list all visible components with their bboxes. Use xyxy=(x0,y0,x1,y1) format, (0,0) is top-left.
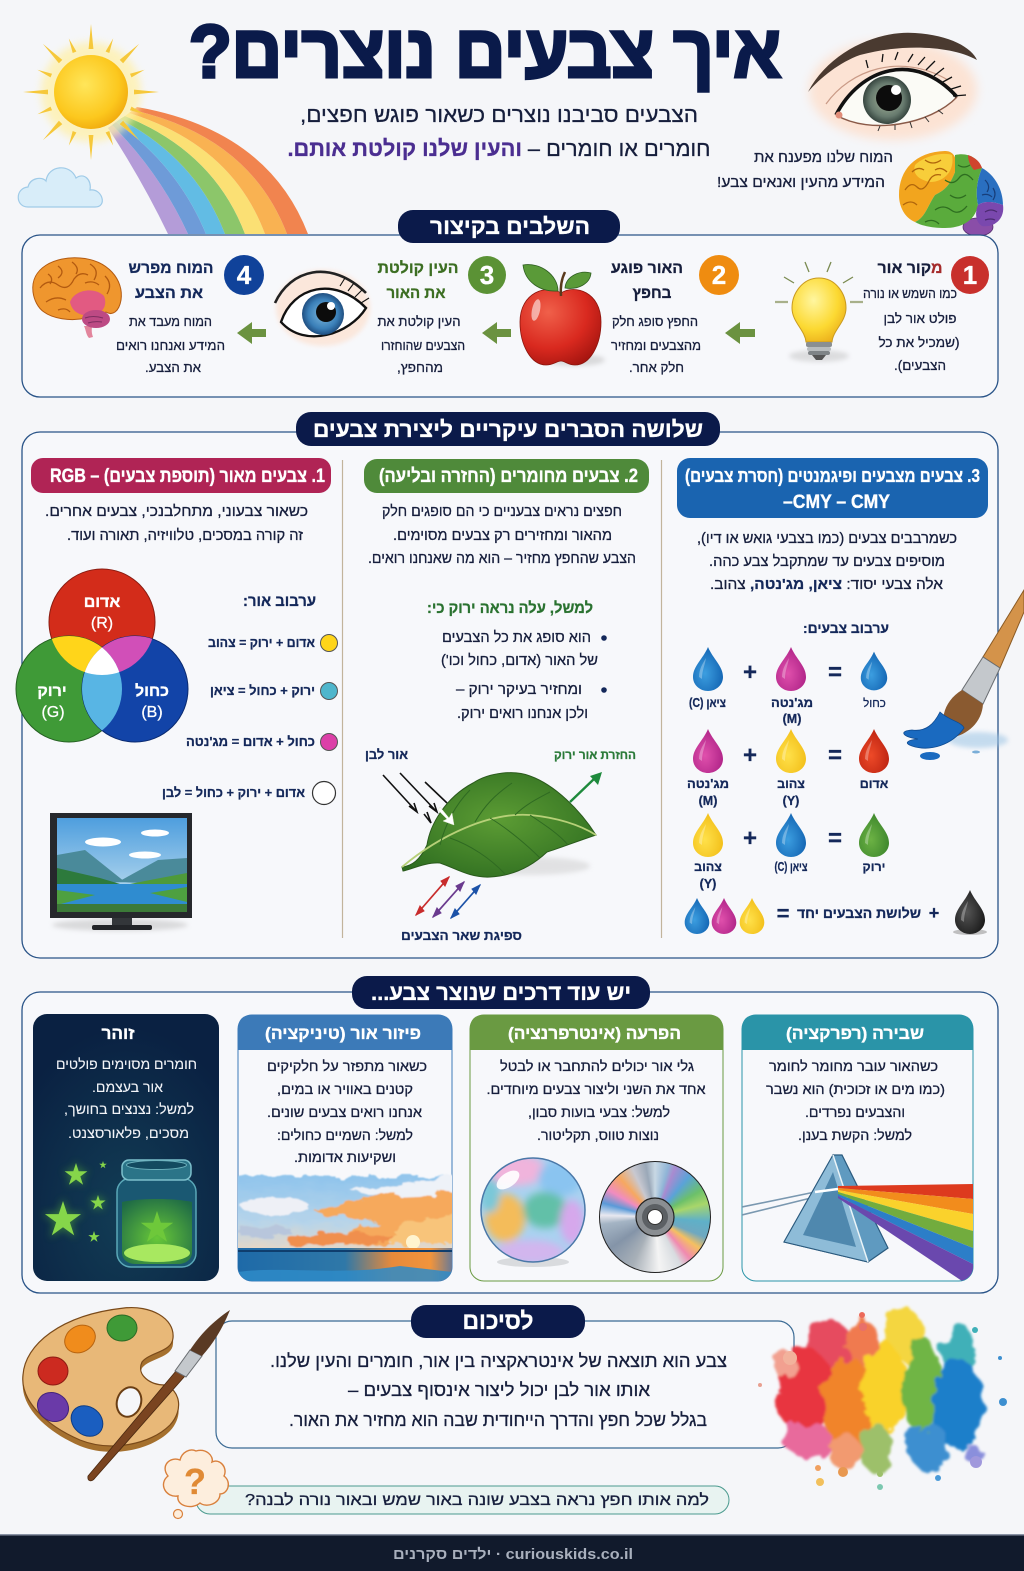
arrow xyxy=(482,322,511,344)
heading: more ways xyxy=(352,976,650,1009)
subtitle xyxy=(287,102,710,161)
subtitle: חומרים או חומרים – והעין שלנו קולטת אותם. xyxy=(287,136,710,161)
chart: pigment mixing: ערבוב צבעים: xyxy=(803,620,889,636)
illustration: eye xyxy=(808,33,977,140)
mix row: yellow + cyan = green: צהוב xyxy=(694,860,722,874)
step 3: eye absorbs light: העין קולטת xyxy=(378,259,458,277)
mix row: yellow + cyan = green: ירוק xyxy=(863,860,885,874)
example list: leaf xyxy=(427,600,607,722)
chart: RGB venn diagram: (G) xyxy=(41,704,65,721)
step 1: light source: כמו השמש או נורה xyxy=(863,286,957,301)
panel: steps xyxy=(22,210,998,397)
example list: leaf: ולכן אנחנו רואים ירוק. xyxy=(457,705,588,722)
step 3: eye absorbs light: הצבעים שהוחזרו xyxy=(381,338,465,353)
step 4: brain interprets: את הצבע xyxy=(135,285,203,302)
illustration: prism and spectrum xyxy=(742,1155,973,1281)
legend: light mixing: אדום + ירוק + כחול = לבן xyxy=(162,785,305,800)
icon: apple xyxy=(520,265,605,366)
card: interference: למשל: צבעי בועות סבון, xyxy=(528,1104,670,1120)
icon: light bulb xyxy=(775,262,863,362)
illustration: rainbow paint splash xyxy=(758,1309,1007,1490)
step 4: brain interprets: המידע ואנחנו רואים xyxy=(116,338,225,353)
card: scattering: פיזור אור (טיניקציה) xyxy=(265,1024,421,1043)
illustration: leaf reflection: החזרת אור ירוק xyxy=(554,748,636,762)
summary text: צבע הוא תוצאה של אינטראקציה בין אור, חומרים והעין שלנו. xyxy=(270,1351,727,1371)
mix row: magenta + yellow = red: מג'נטה xyxy=(687,777,729,791)
legend: light mixing: כחול + אדום = מג'נטה xyxy=(186,734,315,749)
caption: brain xyxy=(717,149,893,191)
example list: leaf: ומחזיר בעיקר ירוק – xyxy=(456,681,582,698)
card: interference: נוצות טווס, תקליטור. xyxy=(537,1127,659,1143)
chart: RGB venn diagram: ירוק xyxy=(37,683,67,700)
legend: light mixing: אדום + ירוק = צהוב xyxy=(208,635,315,650)
step 4: brain interprets: המוח מעבד את xyxy=(129,314,212,329)
card: glow: מסכים, פלאורסצנט. xyxy=(68,1125,189,1141)
illustration: leaf reflection: אור לבן xyxy=(365,747,408,762)
mix row: cyan + magenta = blue xyxy=(689,647,887,726)
heading: summary: לסיכום xyxy=(462,1308,534,1335)
step 1: light source: (שמכיל את כל xyxy=(878,335,960,350)
card: refraction: והצבעים נפרדים. xyxy=(805,1104,905,1120)
mix row: cyan + magenta = blue: ציאן (C) xyxy=(689,696,726,710)
chart: RGB venn diagram: כחול xyxy=(135,682,169,700)
card: scattering: אנחנו רואים צבעים שונים. xyxy=(267,1104,422,1120)
legend: light mixing xyxy=(162,593,338,804)
card: scattering: למשל: השמיים כחולים: xyxy=(277,1127,413,1143)
mix row: yellow + cyan = green: + xyxy=(743,825,757,852)
mix row: all three = black xyxy=(685,890,987,935)
mix row: cyan + magenta = blue: כחול xyxy=(863,697,886,710)
panel: more ways xyxy=(22,976,998,1293)
step 3: eye absorbs light xyxy=(378,256,506,375)
step 3: eye absorbs light: את האור xyxy=(386,285,446,302)
illustration: paintbrush xyxy=(904,590,1024,760)
heading: summary xyxy=(411,1305,585,1338)
mix row: all three = black: שלושת הצבעים יחד xyxy=(797,905,921,921)
summary text: בגלל שכל חפץ והדרך הייחודית שבה הוא מחזיר את האור. xyxy=(289,1410,707,1430)
illustration: television xyxy=(50,813,192,931)
card: scattering: קטנים באוויר או במים, xyxy=(277,1081,413,1097)
step 2: light hits object: מהצבעים ומחזיר xyxy=(611,338,701,353)
column 3 text: מוסיפים צבעים עד שמתקבל צבע כהה. xyxy=(709,553,945,570)
illustration: soap bubble xyxy=(480,1154,585,1267)
card: refraction: שבירה (רפרקציה) xyxy=(786,1024,924,1043)
column 3 text: כשמרבבים צבעים (כמו בצבעי גואש או דיו), xyxy=(697,530,957,547)
mix row: magenta + yellow = red: אדום xyxy=(860,777,889,791)
illustration: leaf reflection: ספיגת שאר הצבעים xyxy=(401,928,522,943)
mix row: magenta + yellow = red: צהוב xyxy=(777,777,805,791)
mix row: magenta + yellow = red: (Y) xyxy=(783,794,799,808)
step 1: light source xyxy=(863,256,989,373)
mix row: yellow + cyan = green: = xyxy=(828,825,842,852)
illustration: colorful brain xyxy=(899,151,1003,245)
column 3 header: –CMY – CMY xyxy=(783,492,890,513)
card: scattering xyxy=(230,1015,460,1281)
illustration: rainbow xyxy=(108,107,308,234)
chart: pigment mixing xyxy=(685,620,987,935)
heading: steps xyxy=(398,210,620,243)
step 1: light source: 1 xyxy=(963,260,977,290)
mix row: yellow + cyan = green: (Y) xyxy=(700,877,716,891)
card: refraction xyxy=(742,1015,973,1281)
chart: RGB venn diagram: (R) xyxy=(91,615,113,632)
column 1 header: 1. צבעים מאור (תוספת צבעים) – RGB xyxy=(50,466,325,487)
illustration: paint palette and brush xyxy=(23,1308,230,1481)
mix row: magenta + yellow = red: (M) xyxy=(699,794,717,808)
mix row: magenta + yellow = red xyxy=(687,729,889,808)
icon: blue eye xyxy=(275,270,370,346)
column 2 header: 2. צבעים מחומרים (החזרה ובליעה) xyxy=(379,466,638,487)
card: interference: גלי אור יכולים להתחבר או לבטל xyxy=(500,1058,694,1074)
example list: leaf: הוא סופג את כל הצבעים xyxy=(442,629,591,646)
chart: RGB venn diagram: אדום xyxy=(84,594,120,611)
step 4: brain interprets: המוח מפרש xyxy=(128,260,214,277)
column 1 text xyxy=(45,503,308,544)
card: scattering: ושקיעות אדומות. xyxy=(294,1149,396,1165)
card: scattering: כשאור מתפזר על חלקיקים xyxy=(267,1058,427,1074)
card: glow: חומרים מסוימים פולטים xyxy=(56,1056,197,1072)
column 2 header xyxy=(364,459,649,493)
illustration: cloud xyxy=(18,168,102,207)
caption: brain: המוח שלנו מפענח את xyxy=(754,149,893,166)
illustration: leaf reflection xyxy=(365,747,636,943)
icon: glowing jar and stars xyxy=(42,1160,196,1267)
icon: orange brain xyxy=(33,258,121,338)
column 3 header: 3. צבעים מצבעים ופיגמנטים (חסרת צבעים) xyxy=(685,466,980,486)
mix row: all three = black: = xyxy=(777,901,789,926)
step 2: light hits object: חלק אחר. xyxy=(629,360,684,375)
summary text xyxy=(270,1351,727,1430)
illustration: compact disc xyxy=(599,1161,711,1273)
step 1: light source: הצבעים). xyxy=(894,358,946,373)
step 4: brain interprets: 4 xyxy=(237,260,252,290)
column 2 text: הצבע שהחפץ מחזיר – הוא מה שאנחנו רואים. xyxy=(368,550,636,567)
example list: leaf: למשל, עלה נראה ירוק כי: xyxy=(427,600,593,617)
card: refraction: למשל: הקשת בענן. xyxy=(798,1127,912,1143)
subtitle: הצבעים סביבנו נוצרים כשאור פוגש חפצים, xyxy=(300,102,698,127)
step 3: eye absorbs light: 3 xyxy=(480,260,494,290)
step 1: light source: מקור אור xyxy=(878,260,942,277)
column 1: light colours xyxy=(16,458,338,931)
title: איך צבעים נוצרים? xyxy=(189,10,781,93)
heading: steps: השלבים בקיצור xyxy=(430,214,590,239)
step 3: eye absorbs light: מהחפץ, xyxy=(397,360,443,375)
column 2: material colours xyxy=(364,459,649,943)
mix row: all three = black: + xyxy=(929,903,939,923)
legend: light mixing: ירוק + כחול = ציאן xyxy=(210,683,315,698)
card: glow: למשל: נצנצים בחושך, xyxy=(64,1101,194,1117)
column 3 header xyxy=(677,458,988,518)
column 3 text: אלה צבעי יסוד: ציאן, מג'נטה, צהוב. xyxy=(710,576,944,593)
mix row: magenta + yellow = red: + xyxy=(743,742,757,769)
mix row: yellow + cyan = green xyxy=(693,813,889,891)
column 1 header xyxy=(31,458,331,493)
caption: brain: המידע מהעין ואנאים צבע! xyxy=(717,174,885,191)
mix row: cyan + magenta = blue: = xyxy=(828,659,842,686)
mix row: cyan + magenta = blue: + xyxy=(743,659,757,686)
card: interference: אחד את השני וליצור צבעים מיוחדים. xyxy=(486,1081,706,1097)
card: refraction: כשהאור עובר מחומר לחומר xyxy=(769,1058,938,1074)
mix row: cyan + magenta = blue: מג'נטה xyxy=(771,696,813,710)
heading: three explanations: שלושה הסברים עיקריים ליצירת צבעים xyxy=(313,417,703,442)
footer xyxy=(0,1534,1024,1571)
mix row: magenta + yellow = red: = xyxy=(828,742,842,769)
step 1: light source: פולט אור לבן xyxy=(884,311,956,326)
summary text: אותו אור לבן יכול ליצור אינסוף צבעים – xyxy=(348,1380,651,1400)
chart: RGB venn diagram: (B) xyxy=(141,704,163,721)
step 2: light hits object: החפץ סופג חלק xyxy=(612,314,698,329)
arrow xyxy=(237,322,266,344)
card: interference: הפרעה (אינטרפרנציה) xyxy=(508,1024,681,1043)
step 4: brain interprets xyxy=(116,255,264,375)
heading: three explanations xyxy=(296,412,720,446)
column 2 text xyxy=(368,503,636,567)
mix row: yellow + cyan = green: ציאן (C) xyxy=(774,860,808,874)
illustration: sunset over sea xyxy=(230,1172,460,1281)
legend: light mixing: ערבוב אור: xyxy=(243,593,316,610)
card: interference xyxy=(470,1015,723,1281)
step 2: light hits object: בחפץ xyxy=(632,285,672,302)
card: refraction: (כמו מים או זכוכית) הוא נשבר xyxy=(766,1081,945,1097)
column 2 text: מהאור ומחזירים רק צבעים מסוימים. xyxy=(393,527,612,544)
question prompt xyxy=(196,1486,729,1514)
heading: more ways: יש עוד דרכים שנוצר צבע... xyxy=(371,980,631,1005)
step 2: light hits object: האור פוגע xyxy=(611,260,683,277)
column 3 text xyxy=(697,530,957,593)
icon: thought bubble with question mark xyxy=(163,1450,228,1518)
panel: summary xyxy=(216,1305,794,1448)
column 1 text: זה קורה במסכים, טלוויזיה, תאורה ועוד. xyxy=(67,527,303,544)
step 4: brain interprets: את הצבע. xyxy=(145,360,202,375)
card: glow xyxy=(33,1014,219,1281)
footer: curiouskids.co.il · ילדים סקרנים xyxy=(393,1546,633,1563)
chart: RGB venn diagram xyxy=(16,569,188,742)
card: glow: אור בעצמם. xyxy=(92,1079,163,1095)
column 2 text: חפצים נראים צבעניים כי הם סופגים חלק xyxy=(382,503,622,520)
step 3: eye absorbs light: העין קולטת את xyxy=(378,314,460,329)
panel: three explanations xyxy=(16,412,998,958)
card: glow: זוהר xyxy=(102,1024,134,1043)
arrow xyxy=(725,322,755,344)
example list: leaf: של האור (אדום, כחול וכו') xyxy=(441,652,598,669)
column 1 text: כשאור צבעוני, מתחלבנכי, צבעים אחרים. xyxy=(45,503,308,520)
question prompt: למה אותו חפץ נראה בצבע שונה באור שמש ובאור נורה לבנה? xyxy=(245,1491,709,1509)
mix row: cyan + magenta = blue: (M) xyxy=(783,712,801,726)
icon: thought bubble with question mark: ? xyxy=(184,1461,206,1502)
step 2: light hits object: 2 xyxy=(712,260,726,290)
step 2: light hits object xyxy=(611,255,739,375)
illustration: sun xyxy=(23,24,159,160)
column 3: pigment colours xyxy=(677,458,988,935)
